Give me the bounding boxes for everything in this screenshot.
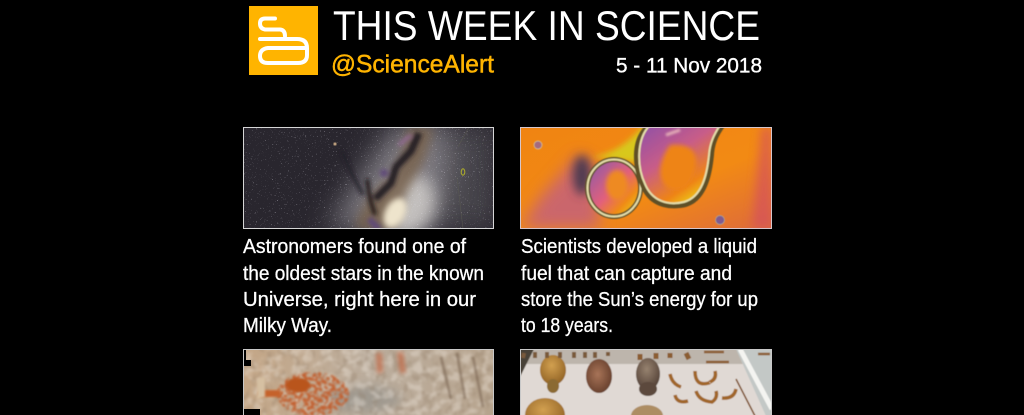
image: cave painting — [243, 349, 494, 415]
title: THIS WEEK IN SCIENCE — [333, 2, 760, 49]
icon: ScienceAlert logo — [249, 6, 318, 75]
image: skulls in a display case — [520, 349, 772, 415]
caption: liquid fuel story — [521, 235, 758, 337]
handle: @ScienceAlert — [331, 50, 494, 78]
caption: liquid fuel story: fuel that can capture and — [521, 262, 732, 285]
caption: Milky Way story: the oldest stars in the known — [243, 262, 484, 285]
caption: liquid fuel story: store the Sun’s energy for up — [521, 288, 758, 311]
caption: liquid fuel story: to 18 years. — [521, 314, 613, 337]
panel: liquid fuel story — [520, 125, 772, 337]
panel: Milky Way story — [243, 127, 494, 337]
caption: liquid fuel story: Scientists developed a liquid — [521, 235, 757, 258]
caption: Milky Way story: Astronomers found one of — [243, 235, 466, 258]
caption: Milky Way story: Universe, right here in our — [243, 288, 476, 311]
image: oil droplets — [520, 125, 772, 229]
date: 5 - 11 Nov 2018 — [616, 54, 762, 78]
caption: Milky Way story — [243, 235, 484, 337]
image: Milky Way night sky — [243, 127, 494, 229]
caption: Milky Way story: Milky Way. — [243, 314, 332, 337]
